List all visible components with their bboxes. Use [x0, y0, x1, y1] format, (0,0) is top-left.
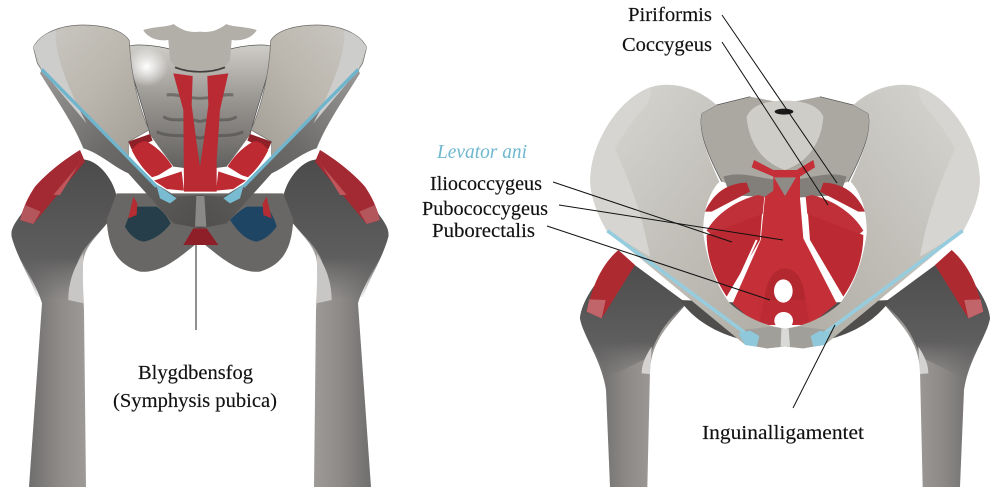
- label: Inguinalligamentet: Inguinalligamentet: [702, 422, 864, 444]
- label: Puborectalis: Puborectalis: [432, 220, 535, 242]
- sacrum: [125, 45, 272, 170]
- label: Blygdbensfog: Blygdbensfog: [138, 362, 253, 384]
- lumbar vertebra: [143, 24, 257, 75]
- label: Pubococcygeus: Pubococcygeus: [422, 198, 548, 220]
- ischium with obturator areas: [107, 193, 293, 272]
- iliac wings: [590, 85, 980, 348]
- label: Symphysis pubica: (Symphysis pubica): [113, 390, 277, 412]
- pointer lines: [547, 15, 837, 408]
- pelvic floor muscles: [705, 160, 865, 329]
- iliac wings and pubic rami: [33, 25, 367, 228]
- femurs and hip muscles: [12, 150, 388, 487]
- sacral canal: [775, 109, 793, 115]
- symphysis band: [195, 196, 206, 227]
- ischium behind wings: [680, 300, 890, 340]
- label: Piriformis: Piriformis: [628, 4, 712, 26]
- left pointer line: [195, 245, 197, 330]
- femurs and hip muscles: [580, 250, 990, 487]
- label: Iliococcygeus: Iliococcygeus: [430, 173, 542, 195]
- red tissue below symphysis: [183, 228, 218, 245]
- left pelvis figure: [12, 24, 388, 487]
- levator muscles: [128, 134, 272, 191]
- right pelvis figure: [580, 85, 990, 487]
- central red muscle: [173, 73, 228, 192]
- label: Coccygeus: Coccygeus: [622, 34, 712, 56]
- sacrum: [701, 97, 869, 200]
- label: Levator ani: Levator ani: [436, 141, 527, 163]
